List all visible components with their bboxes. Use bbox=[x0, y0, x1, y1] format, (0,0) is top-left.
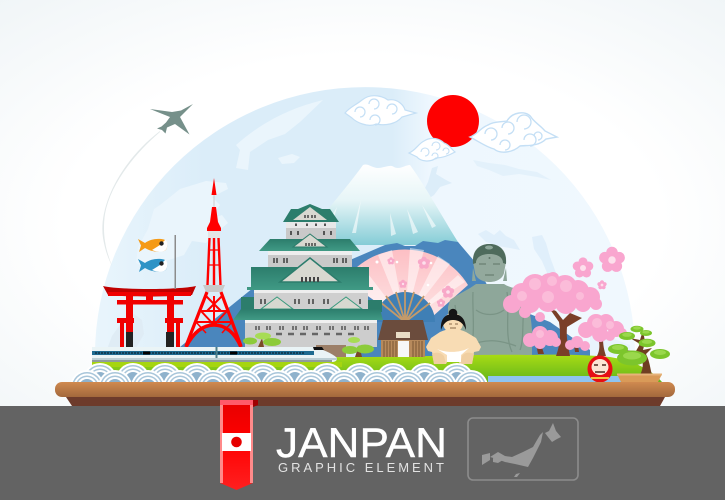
sun bbox=[427, 95, 479, 147]
falling blossoms bbox=[573, 247, 625, 289]
footer band bbox=[0, 406, 725, 500]
bullet train bbox=[92, 347, 337, 362]
castle second tier bbox=[259, 234, 360, 273]
bonsai bushes bbox=[243, 332, 374, 357]
daruma doll bbox=[588, 356, 612, 382]
ground behind train bbox=[316, 345, 346, 357]
cherry blossom trees bbox=[503, 272, 627, 356]
orange koi streamer bbox=[138, 239, 167, 252]
blue koi streamer bbox=[138, 259, 167, 272]
title: JANPAN bbox=[276, 419, 447, 466]
japan map box bbox=[468, 418, 578, 480]
airplane trail bbox=[102, 131, 160, 266]
ribbon badge bbox=[220, 400, 258, 490]
flag pole bbox=[174, 235, 176, 289]
lime strip bbox=[92, 362, 342, 367]
bonsai tree bbox=[608, 326, 670, 382]
airplane bbox=[150, 104, 193, 134]
wave pattern bbox=[73, 363, 488, 382]
wooden platform bbox=[55, 382, 675, 406]
castle top tier bbox=[283, 204, 339, 239]
folding fan bbox=[345, 248, 468, 322]
sumo wrestler bbox=[426, 309, 481, 364]
japan map bbox=[482, 423, 561, 477]
great buddha bbox=[448, 244, 532, 355]
globe bbox=[95, 87, 635, 382]
torii gate bbox=[103, 286, 196, 347]
hill and water bbox=[92, 355, 662, 382]
tokyo tower bbox=[186, 178, 241, 347]
osaka castle bbox=[233, 204, 383, 347]
wooden house bbox=[378, 320, 428, 357]
cloud upper left bbox=[345, 96, 416, 125]
mount fuji bbox=[300, 165, 460, 245]
castle lower tier bbox=[233, 309, 383, 347]
cloud lower bbox=[409, 138, 455, 161]
cloud right bbox=[470, 113, 557, 152]
subtitle: GRAPHIC ELEMENT bbox=[278, 460, 444, 475]
blue mountains bbox=[180, 240, 630, 357]
castle third tier bbox=[247, 258, 373, 309]
continents on the globe bbox=[106, 100, 556, 366]
